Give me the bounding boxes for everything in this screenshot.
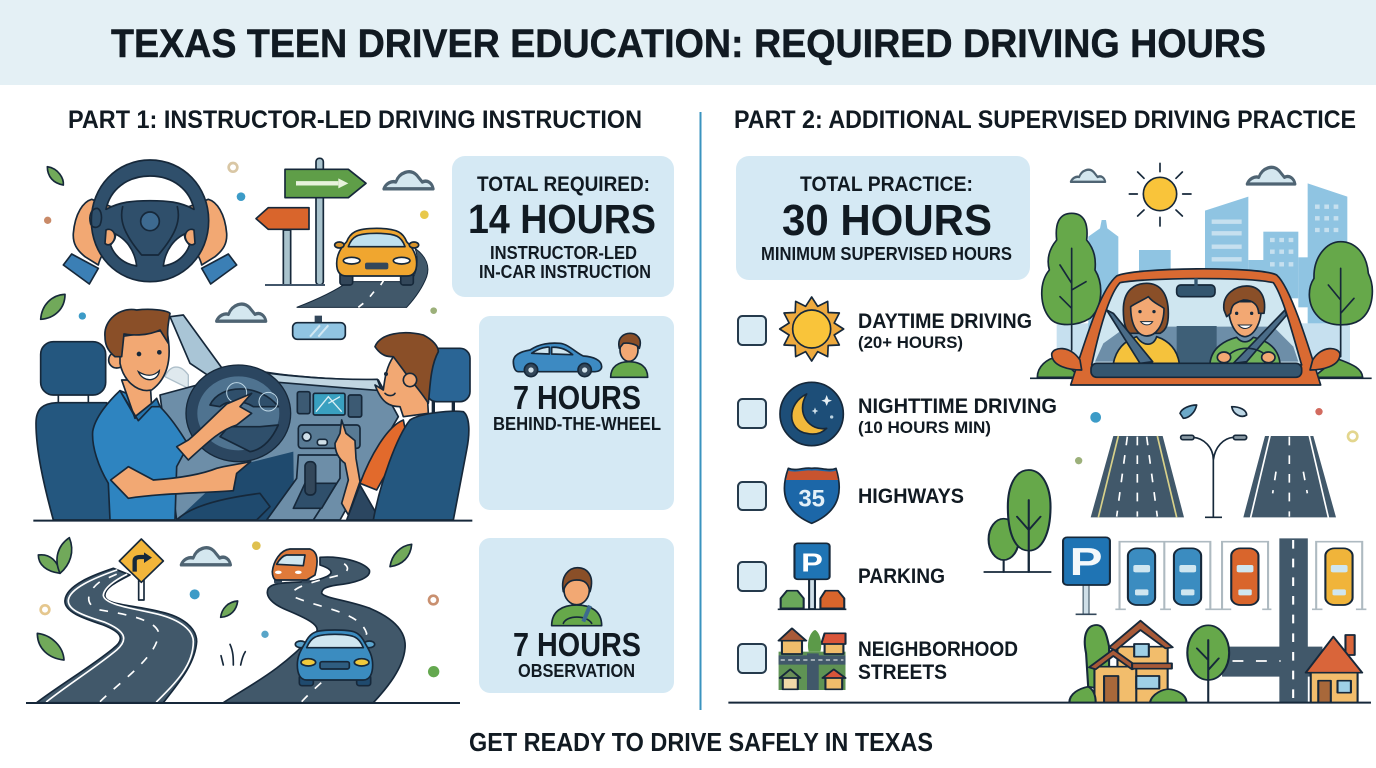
title banner (0, 0, 1376, 85)
label: neighborhood streets (858, 638, 1018, 684)
car windshield frame (1052, 269, 1340, 385)
left road (37, 568, 197, 703)
trees (1037, 213, 1372, 377)
icon: blue car (295, 630, 375, 686)
icon: rear-view mirror (293, 316, 345, 339)
title banner: TEXAS TEEN DRIVER EDUCATION: REQUIRED DRIVING HOURS (111, 22, 1266, 66)
icon: yellow car on road (297, 228, 428, 307)
illustration: winding roads (26, 538, 460, 703)
street network (1222, 538, 1322, 703)
label: daytime driving: DAYTIME DRIVING (858, 310, 1032, 333)
icon: interstate 35 (784, 468, 839, 523)
label: neighborhood streets: NEIGHBORHOOD (858, 638, 1018, 661)
decorations: leaves, dots, cloud (37, 538, 439, 677)
panel: total practice: TOTAL PRACTICE: (800, 173, 973, 196)
checkbox: nighttime (738, 399, 766, 428)
parked cars (1128, 548, 1353, 605)
heading: part 1: PART 1: INSTRUCTOR-LED DRIVING INSTRUCTION (68, 106, 642, 134)
passenger seat left (36, 342, 113, 520)
icons: sun, moon, interstate shield (780, 297, 844, 523)
icon: parking checklist: P (801, 549, 823, 578)
center console (267, 392, 362, 520)
small house (1306, 635, 1362, 703)
panel: behind the wheel: BEHIND-THE-WHEEL (493, 414, 661, 434)
icon: steering wheel with hands (63, 160, 237, 284)
label: daytime driving: (20+ HOURS) (858, 333, 963, 352)
roadside tree (1187, 625, 1229, 703)
label: nighttime driving: (10 HOURS MIN) (858, 418, 991, 437)
icon: blue car and person (513, 333, 648, 377)
panel: total required: INSTRUCTOR-LED (490, 243, 637, 263)
panel: total required: IN-CAR INSTRUCTION (479, 262, 651, 282)
panel: total practice: MINIMUM SUPERVISED HOURS (761, 244, 1012, 264)
panel: total required (452, 156, 674, 297)
driving wheel in dash (186, 365, 291, 462)
icon: interstate 35: 35 (798, 485, 825, 512)
label: neighborhood streets: STREETS (858, 661, 947, 684)
icon: sun with rays (1129, 163, 1191, 226)
student figure and seat (335, 333, 470, 520)
icon: parking checklist (778, 543, 846, 609)
illustration: neighborhood, parking, icons (728, 470, 1371, 703)
icon: observing driver (552, 568, 602, 626)
panel: total required: TOTAL REQUIRED: (477, 173, 650, 196)
large house (1069, 621, 1186, 703)
icon: curve warning sign (119, 539, 163, 600)
panel: behind the wheel (479, 316, 674, 510)
label: parking: PARKING (858, 565, 945, 588)
icon: direction signs (256, 158, 366, 285)
left highway (1091, 436, 1184, 517)
icon: neighborhood map (779, 628, 846, 690)
checkbox: highways (738, 482, 766, 510)
trees by parking (984, 470, 1051, 572)
car interior scene (33, 309, 472, 521)
panel: behind the wheel: 7 HOURS (513, 379, 641, 416)
icon: large parking sign: P (1070, 541, 1103, 584)
panel: observation (479, 538, 674, 693)
woman passenger (1107, 283, 1179, 363)
skyline (1057, 183, 1350, 377)
dashboard (1091, 363, 1302, 377)
icon: clouds and leaves (41, 163, 437, 321)
icon: sun (780, 297, 844, 361)
decoration dots and leaves (1075, 405, 1357, 464)
icon: orange car (272, 549, 317, 583)
clouds (1071, 167, 1295, 184)
right highway (1243, 436, 1336, 517)
checkbox: daytime (738, 316, 766, 345)
label: highways: HIGHWAYS (858, 485, 964, 508)
icon: moon (780, 382, 843, 446)
parking lot lines (1115, 542, 1366, 609)
street lamp (1181, 435, 1247, 517)
footer tagline: GET READY TO DRIVE SAFELY IN TEXAS (469, 727, 933, 757)
label: daytime driving (858, 310, 1032, 352)
illustration: highways and street lamp (1075, 405, 1357, 517)
panel: total practice: 30 HOURS (782, 196, 992, 245)
label: nighttime driving: NIGHTTIME DRIVING (858, 395, 1057, 418)
label: nighttime driving (858, 395, 1057, 437)
checkbox: neighborhood (738, 644, 766, 673)
panel: observation: OBSERVATION (518, 661, 635, 681)
panel: observation: 7 HOURS (513, 626, 641, 663)
right road (223, 557, 405, 703)
checkbox: parking (738, 562, 766, 591)
illustration: couple in car with skyline (1030, 163, 1372, 385)
teen driver (1210, 286, 1287, 363)
panel: total practice (736, 156, 1030, 280)
icon: large parking sign (1063, 537, 1110, 614)
instructor figure (93, 309, 270, 520)
panel: total required: 14 HOURS (468, 196, 656, 242)
illustration: hands on wheel, signs and instructor in car (33, 158, 472, 521)
